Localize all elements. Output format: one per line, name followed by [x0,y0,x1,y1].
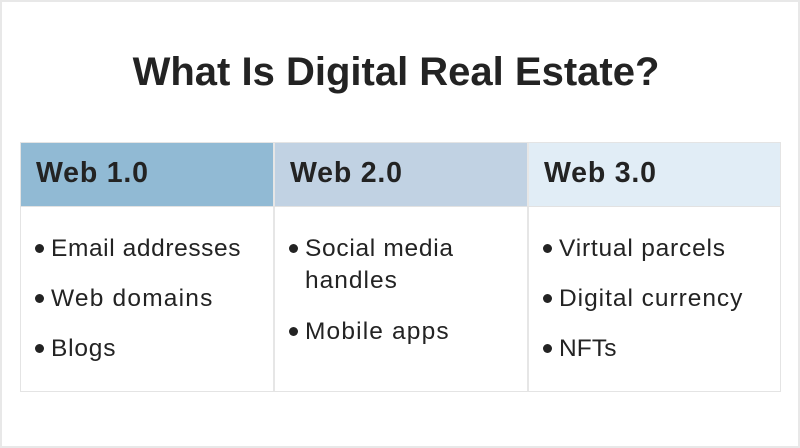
title: What Is Digital Real Estate? [133,50,659,94]
list: Web 3.0 items: Virtual parcels [559,235,726,262]
header: Web 2.0: Web 2.0 [290,157,403,189]
list: Web 1.0 items [35,235,241,362]
list: Web 1.0 items: Email addresses [51,235,241,262]
column divider 1 [273,143,275,391]
header: Web 1.0: Web 1.0 [36,157,149,189]
list: Web 2.0 items: handles [305,267,398,294]
header: Web 3.0: Web 3.0 [544,157,657,189]
list: Web 3.0 items: NFTs [559,335,617,362]
list: Web 3.0 items [543,235,743,362]
header: Web 2.0 [275,143,527,206]
list: Web 2.0 items: Social media [305,235,454,262]
list: Web 1.0 items: Web domains [51,285,214,312]
column divider 2 [527,143,529,391]
panel: table [20,142,781,392]
list: Web 1.0 items: Blogs [51,335,116,362]
list: Web 3.0 items: Digital currency [559,285,743,312]
header: Web 3.0 [529,143,780,206]
list: Web 2.0 items [289,235,454,345]
list: Web 2.0 items: Mobile apps [305,318,450,345]
header rule [20,206,781,207]
header: Web 1.0 [21,143,273,206]
